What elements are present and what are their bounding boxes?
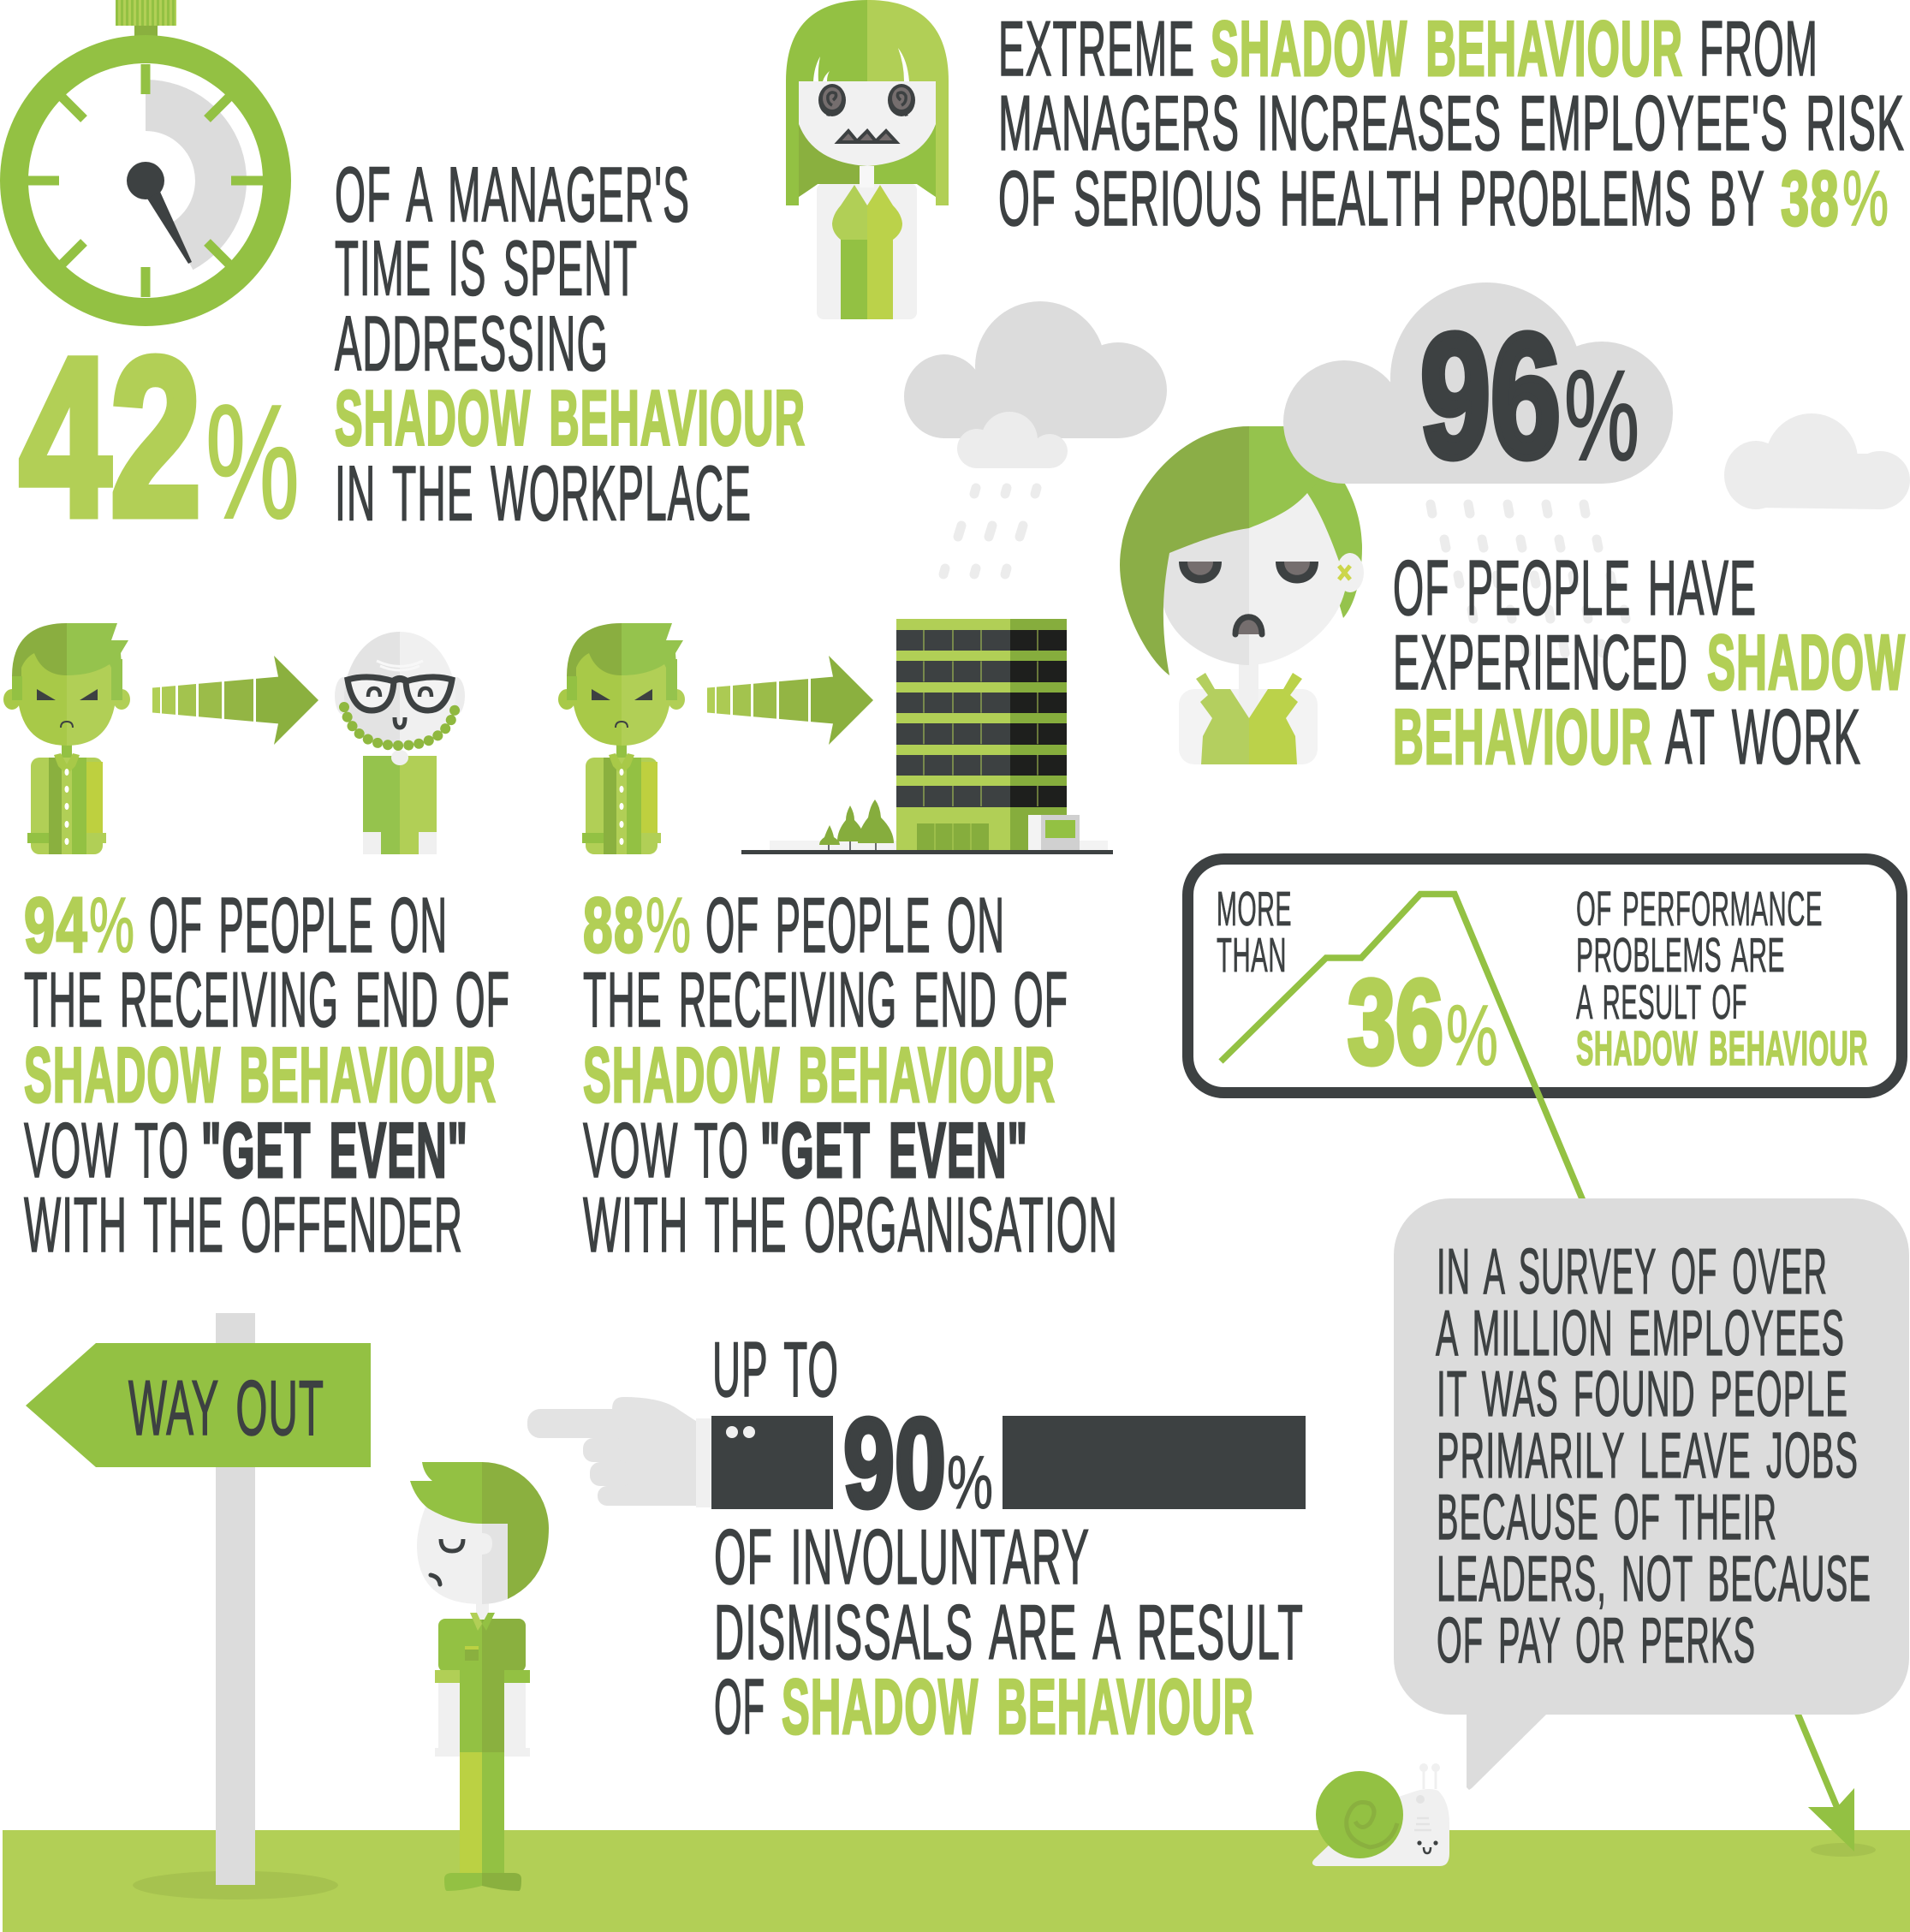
stat: 90%: % (947, 1440, 993, 1525)
icon: spiral eyes (818, 84, 915, 116)
text: manager's time: OF A MANAGER'S (335, 152, 690, 238)
icon: glasses (348, 677, 452, 710)
arrow: man to building (707, 656, 873, 745)
stat: 90%: 90 (843, 1393, 946, 1534)
text: get even with offender: % (89, 883, 134, 969)
text: get even with organisation: VOW TO (583, 1108, 749, 1194)
stat: 96%: 96 (1420, 298, 1561, 494)
icon: tired eyes (1179, 562, 1318, 584)
icon: snail (1312, 1763, 1449, 1866)
text: get even with organisation: THE RECEIVING END OF (583, 957, 1068, 1043)
text: performance problems: A RESULT OF (1576, 975, 1747, 1030)
panel: speech bubble (1394, 1198, 1909, 1790)
text: more than: THAN (1217, 928, 1287, 983)
text: extreme shadow behaviour (998, 6, 1905, 242)
icon: cloud right (1724, 413, 1910, 509)
bar: right black bar (1003, 1416, 1306, 1509)
text: involuntary dismissals: OF INVOLUNTARY (714, 1514, 1090, 1601)
icon: stressed woman (786, 0, 949, 319)
icon: trees (819, 800, 894, 850)
icon: office building (741, 619, 1113, 854)
text: extreme shadow behaviour: EXTREME (998, 6, 1195, 92)
text: get even with offender: VOW TO (24, 1108, 189, 1194)
icon: angry man (3, 623, 130, 854)
stat: 42%: % (205, 372, 300, 553)
icon: sad man (410, 1462, 549, 1891)
stat: 42%: 42 (20, 312, 201, 562)
icon: way out sign: WAY OUT (128, 1365, 324, 1452)
text: get even with organisation: 88 (583, 883, 645, 969)
icon: rain clouds left (904, 301, 1167, 574)
arrow: man to man (152, 656, 318, 745)
cloud large (904, 301, 1167, 438)
text: involuntary dismissals: DISMISSALS ARE A RESULT (714, 1590, 1304, 1676)
text: get even with offender: OF PEOPLE ON (149, 883, 448, 969)
stat: 96%: % (1564, 343, 1639, 487)
icon: woman under cloud (1120, 426, 1370, 764)
text: up to: UP TO (712, 1327, 839, 1413)
text: get even with offender (24, 883, 510, 1269)
text: extreme shadow behaviour: 38 (1781, 156, 1840, 242)
icon: stopwatch (0, 0, 291, 326)
ground (3, 1830, 1910, 1932)
icon: post shadow (133, 1871, 338, 1899)
text: get even with organisation: WITH THE ORGANISATION (583, 1182, 1118, 1269)
text: THE RECEIVING END OF (24, 957, 510, 1043)
icon: pointing hand (527, 1397, 711, 1507)
text: manager's time: TIME IS SPENT (335, 226, 638, 312)
text: manager's time: SHADOW BEHAVIOUR (335, 375, 806, 462)
text: get even with offender: "GET EVEN" (201, 1108, 468, 1194)
text: involuntary dismissals (714, 1514, 1304, 1751)
text: involuntary dismissals: SHADOW BEHAVIOUR (782, 1664, 1254, 1751)
icon: old man with glasses (335, 632, 465, 854)
arrow: performance line chart (1221, 894, 1854, 1852)
cloud small (957, 412, 1068, 468)
text: involuntary dismissals: OF (714, 1664, 765, 1751)
text: manager's time: ADDRESSING (335, 301, 609, 387)
text: manager's time (335, 152, 806, 538)
text: people have experienced: BEHAVIOUR (1393, 694, 1652, 781)
text: more than (1217, 882, 1292, 983)
icon: frown mouth (1235, 617, 1262, 634)
panel: performance problems box (1188, 859, 1902, 1092)
stat: 36%: 36 (1348, 954, 1443, 1089)
text: survey (1436, 1235, 1871, 1676)
icon: dark cloud with 96% (1283, 282, 1673, 494)
text: extreme shadow behaviour: % (1842, 156, 1889, 242)
text: get even with offender: 94 (24, 883, 88, 969)
text: performance problems (1576, 882, 1868, 1076)
text: get even with organisation: OF PEOPLE ON (705, 883, 1005, 969)
text: more than: MORE (1217, 882, 1292, 936)
text: get even with offender: SHADOW BEHAVIOUR (24, 1032, 497, 1119)
icon: arrow shadow (1811, 1843, 1876, 1857)
text: manager's time: IN THE WORKPLACE (335, 450, 752, 538)
text: get even with organisation: % (646, 883, 691, 969)
icon: zigzag mouth (838, 131, 896, 142)
text: get even with organisation: "GET EVEN" (760, 1108, 1028, 1194)
icon: way out sign (26, 1313, 371, 1885)
text: get even with offender: WITH THE OFFENDER (24, 1182, 463, 1269)
text: people have experienced (1393, 545, 1906, 781)
text: get even with organisation (583, 883, 1118, 1269)
rain drops (943, 488, 1037, 574)
icon: angry man 2 (558, 623, 685, 854)
icon: rain under 96 cloud (1431, 504, 1626, 653)
bar: left black sleeve (711, 1416, 833, 1509)
stat: 36%: % (1446, 988, 1498, 1084)
arrow: arrow head over ground (1808, 1788, 1854, 1852)
text: get even with organisation: SHADOW BEHAVIOUR (583, 1032, 1056, 1119)
icon: ear plaster (1339, 566, 1350, 580)
